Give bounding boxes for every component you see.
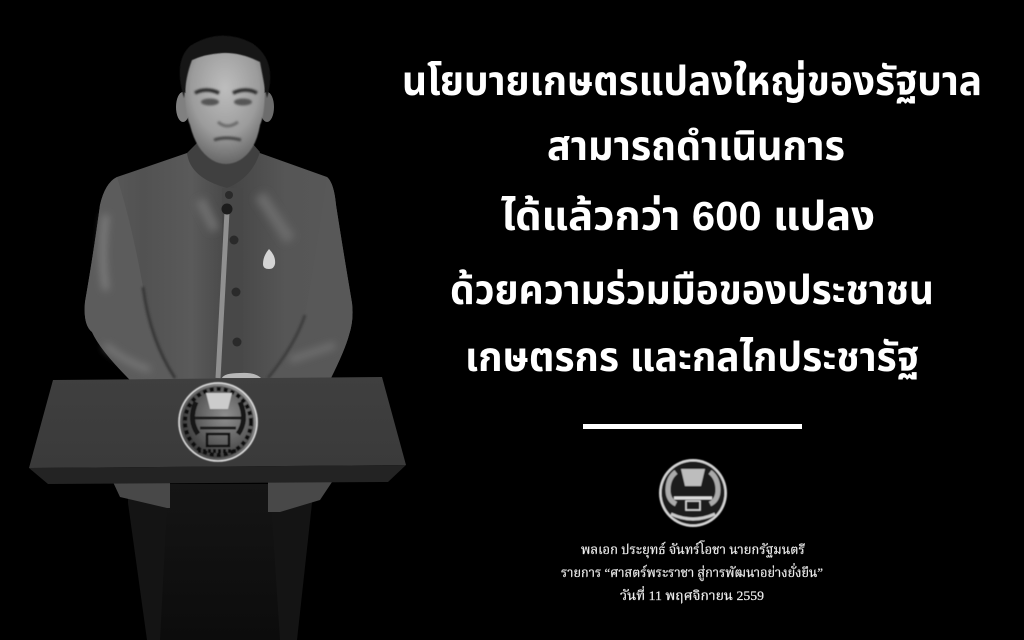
headline: เกษตรกร และกลไกประชารัฐ (465, 334, 919, 380)
facial features (195, 90, 257, 140)
credit text: พลเอก ประยุทธ์ จันทร์โอชา นายกรัฐมนตรี (581, 541, 805, 558)
credit text: วันที่ 11 พฤศจิกายน 2559 (620, 586, 764, 603)
headline: นโยบายเกษตรแปลงใหญ่ของรัฐบาล (402, 58, 982, 104)
headline: สามารถดำเนินการ (547, 123, 845, 169)
hands (222, 373, 261, 378)
divider (583, 424, 802, 429)
microphone (218, 204, 232, 378)
credit text: รายการ “ศาสตร์พระราชา สู่การพัฒนาอย่างยั่งยืน” (561, 563, 823, 581)
trousers (128, 484, 312, 640)
emblem (659, 459, 727, 527)
podium (29, 377, 406, 484)
headline: ด้วยความร่วมมือของประชาชน (450, 267, 934, 313)
photo: speaker at podium (29, 36, 406, 640)
podium seal (178, 382, 258, 462)
hair (180, 36, 270, 98)
pin badge (263, 249, 275, 269)
jacket (85, 135, 353, 380)
jacket hem (113, 482, 332, 512)
headline: ได้แล้วกว่า 600 แปลง (501, 193, 875, 239)
head (185, 52, 265, 164)
credit text (561, 541, 823, 603)
headline (402, 58, 982, 380)
ears (176, 92, 274, 122)
